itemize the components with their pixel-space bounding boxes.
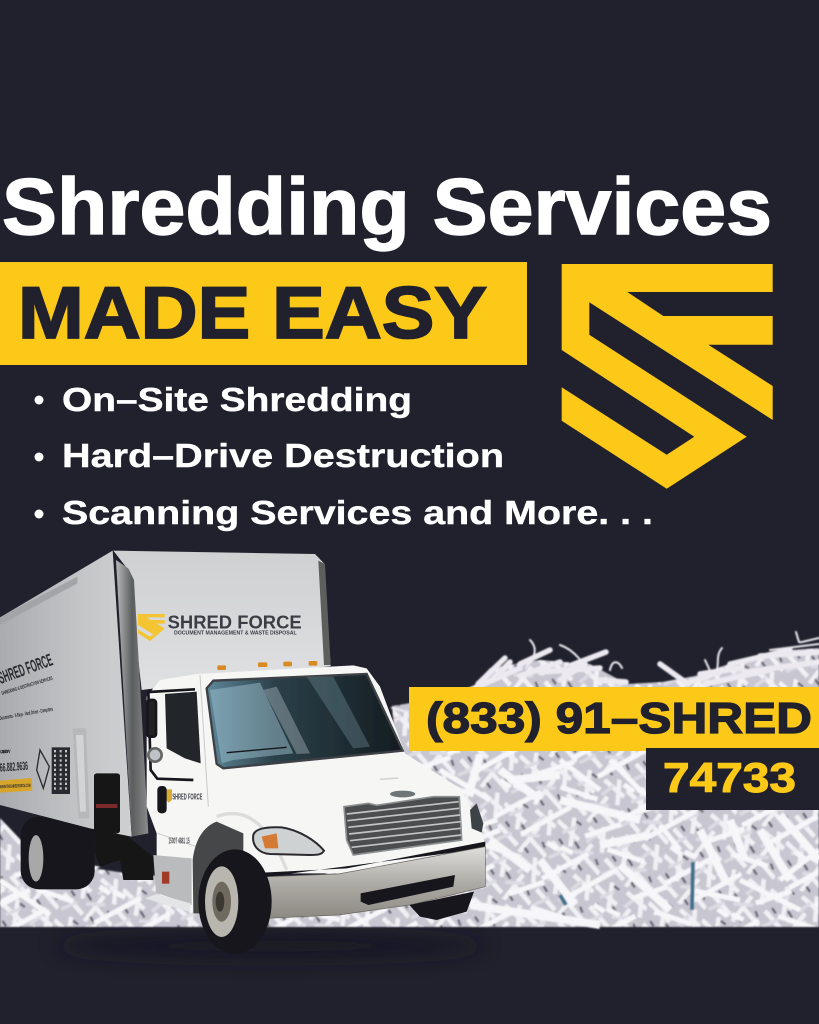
hood highlights	[380, 778, 398, 779]
chassis and mud flap	[94, 773, 153, 880]
service: hard-drive destruction: Hard–Drive Destruction	[62, 437, 504, 474]
side lettering: CALL NOW	[0, 749, 11, 754]
step and fuel tank	[145, 855, 192, 912]
side window	[165, 692, 201, 763]
rear wheels	[21, 817, 95, 889]
icon: shred force shield logo	[562, 264, 773, 489]
shredded paper pile	[0, 632, 819, 927]
headlight	[253, 827, 324, 855]
title: Shredding Services	[2, 162, 772, 251]
banner: made easy	[0, 262, 527, 365]
text code box: 74733	[663, 754, 796, 801]
phone number banner	[409, 687, 819, 751]
ink flecks on strips	[560, 862, 693, 910]
service: scanning services and more: Scanning Services and More. . .	[62, 494, 653, 531]
paper strips, foreground	[0, 755, 819, 925]
front bumper	[250, 842, 485, 920]
truck box lettering: SHRED FORCE	[168, 612, 302, 633]
truck box logo	[138, 612, 302, 641]
front wheel	[193, 822, 272, 954]
cab body	[147, 665, 486, 913]
box side panel	[0, 551, 132, 837]
door seam and handle	[157, 675, 208, 847]
text code box	[646, 748, 819, 810]
service: on-site shredding: On–Site Shredding	[62, 381, 412, 418]
box front face	[113, 551, 331, 690]
grille	[344, 791, 462, 855]
door logo: SHRED FORCE	[172, 792, 203, 801]
delivery truck	[0, 551, 486, 954]
door logo	[157, 786, 203, 845]
phone number banner: (833) 91–SHRED	[426, 694, 812, 743]
service list	[34, 381, 653, 531]
side lettering: WWW.THESHREDFORCE.COM	[0, 783, 31, 789]
side lettering	[0, 650, 70, 794]
paper wisps along the top	[392, 632, 819, 720]
door logo: 15007 4881 15	[168, 836, 190, 845]
windshield	[207, 674, 403, 768]
side mirror	[147, 689, 195, 780]
fender shading	[217, 814, 287, 870]
side lettering: Documents - X-Rays - Hard Drives - Computers	[0, 707, 54, 722]
cab marker lights	[217, 661, 317, 670]
banner: made easy: MADE EASY	[18, 273, 487, 354]
box corner post	[116, 560, 148, 837]
side lettering: 66.882.9636	[0, 759, 29, 775]
truck box lettering: DOCUMENT MANAGEMENT & WASTE DISPOSAL	[174, 631, 297, 637]
marker lamp	[470, 803, 483, 833]
ground shadow	[55, 933, 485, 959]
side lettering: SHREDDING & DESTRUCTION SERVICES	[1, 675, 54, 697]
